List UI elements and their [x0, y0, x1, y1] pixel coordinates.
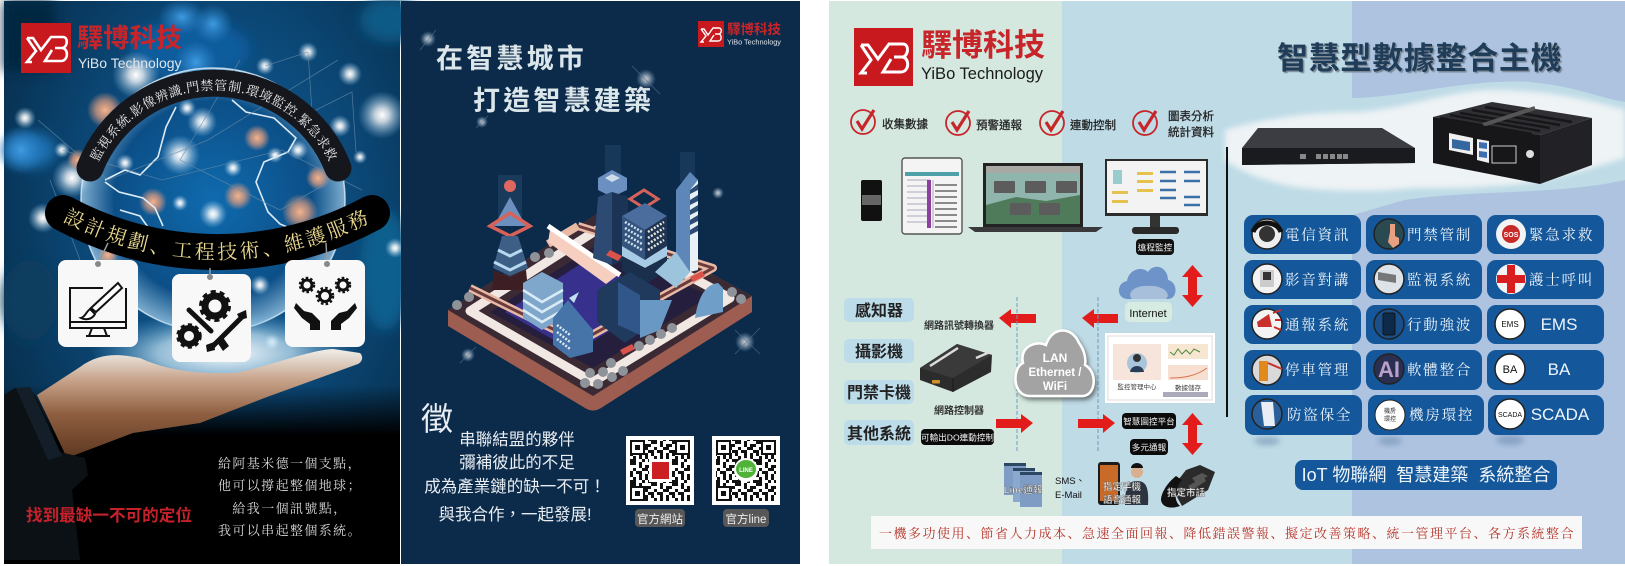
QR label: line	[723, 509, 769, 527]
QR code: line: LINE	[739, 468, 753, 474]
title: 智慧型數據整合主機	[1277, 41, 1562, 76]
button: software integration: 軟體整合	[1407, 361, 1472, 379]
caption: Archimedes quote: 給阿基米德一個支點，	[218, 456, 362, 472]
IoT banner: IoT 物聯網 智慧建築 系統整合	[1302, 465, 1550, 485]
arrow: platform up/down	[1182, 413, 1203, 455]
label: SMS email: E-Mail	[1055, 490, 1082, 501]
panel: middle poster, smart building	[401, 1, 800, 564]
check item: charts: 圖表分析	[1168, 109, 1214, 123]
button: PA system: 通報系統	[1285, 316, 1350, 334]
icon card: engineering	[172, 274, 251, 362]
button: surveillance	[1366, 260, 1482, 299]
label: other systems	[844, 420, 914, 445]
check item: alert: 預警通報	[976, 118, 1022, 132]
check item: control: 連動控制	[1070, 118, 1116, 132]
check item: collect data: 收集數據	[882, 117, 928, 131]
icon: desk phone: 指定市話	[1167, 487, 1205, 499]
caption: Archimedes quote: 給我一個訊號點，	[232, 501, 348, 517]
caption: Archimedes quote: 我可以串起整個系統。	[218, 523, 362, 538]
icon card: maintenance	[285, 260, 365, 347]
check item: charts: 統計資料	[1168, 125, 1214, 139]
button: EMS: EMS	[1541, 315, 1577, 334]
benefits strip: 一機多功使用、節省人力成本、急速全面回報、降低錯誤警報、擬定改善策略、統一管理平台、各方系統整合	[879, 526, 1575, 541]
button: access control: 門禁管制	[1407, 226, 1472, 244]
button: intercom	[1244, 260, 1361, 299]
button: server room: 環控	[1384, 415, 1396, 423]
white road ring	[470, 228, 730, 382]
QR label: website: 官方網站	[637, 512, 683, 526]
button: software integration	[1366, 350, 1482, 390]
label: multi notify	[1130, 439, 1168, 455]
icon card: design	[58, 260, 138, 347]
shadow under buttons	[1254, 435, 1524, 445]
button: telecom	[1244, 215, 1361, 254]
panel: right poster, data host	[829, 1, 1625, 564]
device: tablet	[902, 158, 962, 234]
heading: 打造智慧建築	[473, 86, 654, 116]
tall blue tower with cap	[593, 145, 628, 265]
button: access control	[1366, 215, 1482, 254]
slim skyscraper	[655, 152, 698, 288]
white wave glow behind hardware	[1225, 90, 1625, 191]
button: mobile signal	[1366, 305, 1482, 344]
panel: left poster, global services	[0, 0, 422, 564]
background star glows	[0, 0, 406, 350]
light-blue wave behind hardware	[1352, 81, 1625, 215]
small logo	[698, 21, 781, 47]
button: nurse call: 護士呼叫	[1529, 272, 1594, 289]
icon: LAN cloud: Ethernet /	[1028, 367, 1082, 379]
label: DO output: 可輸出DO連動控制	[921, 432, 994, 442]
QR label: line: 官方line	[726, 512, 766, 526]
lower black fade	[4, 385, 400, 435]
logo: YiBo Technology	[78, 55, 182, 71]
IoT banner	[1295, 460, 1557, 490]
city base slab	[448, 212, 752, 410]
small logo: 驛博科技	[727, 21, 781, 37]
recruit text: 徵	[421, 401, 453, 437]
arrow: internet up/down	[1182, 265, 1203, 307]
button: telecom: 電信資訊	[1285, 227, 1350, 244]
icon: phone and person notification: 指定手機	[1103, 481, 1141, 493]
logo: YiBo Technology	[921, 65, 1044, 83]
recruit text: 與我合作，一起發展!	[438, 505, 592, 524]
label: internet	[1125, 302, 1172, 322]
arc banner: services: 設計規劃、工程技術、維護服務	[64, 207, 367, 261]
button: PA system	[1244, 305, 1361, 344]
icon: internet cloud	[1119, 267, 1176, 299]
button: SOS	[1487, 215, 1604, 254]
icon: LAN cloud: LAN	[1043, 351, 1067, 365]
button: SOS: SOS	[1504, 232, 1519, 239]
hardware: fanless box PC	[1433, 102, 1592, 184]
button: mobile signal: 行動強波	[1407, 317, 1472, 334]
benefits strip	[871, 516, 1582, 549]
network lines	[38, 52, 362, 260]
device: monitor	[1105, 159, 1208, 234]
dashboard screen card	[1105, 333, 1215, 403]
arrow: left to devices	[999, 309, 1036, 328]
caption: Archimedes quote: 他可以撐起整個地球；	[218, 478, 362, 493]
device: phone	[861, 180, 882, 221]
recruit text	[421, 401, 606, 524]
device caption: controller: 網路控制器	[934, 404, 984, 417]
label: graphic control platform: 智慧圖控平台	[1123, 416, 1175, 426]
arrow: right to platform	[1078, 414, 1115, 433]
side colour patches	[2, 0, 420, 340]
icon: open hand	[37, 349, 362, 458]
button: SCADA: SCADA	[1531, 405, 1590, 424]
button: nurse call	[1487, 260, 1604, 299]
label: SMS email: SMS、	[1055, 476, 1085, 487]
button: parking	[1244, 350, 1361, 390]
button: SOS: 緊急求救	[1529, 227, 1594, 244]
dashboard screen card: 監控管理中心	[1118, 382, 1157, 391]
arc banner: system list: 監視系統.影像辨識.門禁管制.環境監控.緊急求救	[89, 79, 338, 162]
isometric city illustration	[448, 145, 752, 410]
track cars	[606, 250, 705, 355]
button: parking: 停車管理	[1285, 361, 1350, 379]
logo: 驛博科技	[921, 28, 1045, 63]
logo: 驛博科技	[77, 23, 182, 53]
button: server room: 機房	[1384, 407, 1396, 415]
globe disc	[81, 68, 345, 332]
label: multi notify: 多元通報	[1132, 442, 1167, 452]
vertical divider	[1226, 147, 1228, 417]
QR label: website	[635, 509, 685, 527]
heading: 在智慧城市	[436, 43, 587, 74]
arrow: left from internet	[1082, 309, 1118, 328]
button: SCADA	[1488, 395, 1604, 435]
icon: LAN cloud	[1015, 330, 1094, 396]
light beam above hand	[90, 303, 360, 387]
dashboard screen card: 數據儲存	[1175, 383, 1202, 392]
button: server room: 機房環控	[1409, 407, 1474, 424]
button: server room	[1368, 395, 1484, 435]
sleeve	[4, 388, 88, 560]
icon: line notification sheets	[1004, 463, 1043, 507]
button: BA	[1487, 350, 1604, 390]
check item: collect data	[851, 110, 928, 134]
decorative star sparkles	[420, 30, 760, 363]
trees	[452, 248, 746, 389]
recruit text: 串聯結盟的夥伴	[459, 430, 575, 449]
hardware: rack server	[1242, 128, 1415, 165]
check item: alert	[946, 111, 1022, 135]
tower with red ring	[490, 175, 530, 290]
arrow: right from controller	[996, 414, 1033, 433]
button: EMS: EMS	[1501, 320, 1519, 329]
logo	[21, 23, 182, 73]
icon: phone and person notification: 語音通報	[1103, 494, 1141, 506]
globe outline	[81, 68, 345, 332]
recruit text: 成為產業鏈的缺一不可！	[424, 477, 606, 496]
button: software integration: AI	[1378, 357, 1400, 382]
button: SCADA: SCADA	[1498, 412, 1522, 419]
icon: desk phone	[1161, 465, 1215, 508]
label: remote monitoring	[1136, 239, 1174, 255]
button: anti-theft	[1245, 395, 1362, 435]
button: intercom: 影音對講	[1285, 272, 1350, 289]
icon: LAN cloud: WiFi	[1043, 381, 1067, 393]
slogan in red: 找到最缺一不可的定位	[26, 505, 192, 525]
device caption: signal converter: 網路訊號轉換器	[924, 319, 994, 332]
icon: phone and person notification	[1098, 462, 1148, 506]
device: laptop	[968, 163, 1103, 232]
button: EMS	[1487, 305, 1604, 344]
caption: Archimedes quote	[218, 456, 362, 538]
button: BA: BA	[1503, 364, 1518, 376]
label: SMS email	[1055, 476, 1085, 501]
QR code: line	[712, 436, 780, 505]
label: cameras	[844, 339, 914, 363]
check item: charts	[1133, 109, 1214, 139]
logo	[854, 28, 1045, 86]
label: access control: 門禁卡機	[847, 384, 911, 402]
label: access control	[844, 380, 914, 404]
label: cameras: 攝影機	[855, 342, 903, 361]
recruit text: 彌補彼此的不足	[459, 453, 575, 472]
connectors to cards	[98, 243, 327, 277]
button: anti-theft: 防盜保全	[1287, 407, 1352, 424]
system button grid	[1244, 215, 1604, 445]
small logo: YiBo Technology	[727, 38, 781, 46]
label: sensors	[844, 298, 914, 322]
label: DO output	[921, 429, 994, 445]
button: surveillance: 監視系統	[1407, 272, 1472, 289]
checklist	[851, 109, 1214, 139]
window building	[622, 190, 667, 288]
dashed dividers	[1017, 297, 1098, 452]
label: sensors: 感知器	[855, 301, 903, 320]
label: internet: Internet	[1129, 308, 1167, 320]
label: graphic control platform	[1122, 413, 1176, 429]
check item: control	[1040, 111, 1116, 135]
button: BA: BA	[1548, 360, 1571, 379]
lower buildings cluster	[523, 272, 723, 358]
QR code: website	[626, 436, 694, 505]
icon: line notification sheets: Line通報	[1004, 484, 1043, 496]
heading	[436, 43, 654, 116]
pink elevated track	[470, 226, 713, 342]
device: network controller box	[920, 344, 992, 392]
label: other systems: 其他系統	[847, 424, 911, 443]
label: remote monitoring: 遠程監控	[1138, 242, 1173, 252]
